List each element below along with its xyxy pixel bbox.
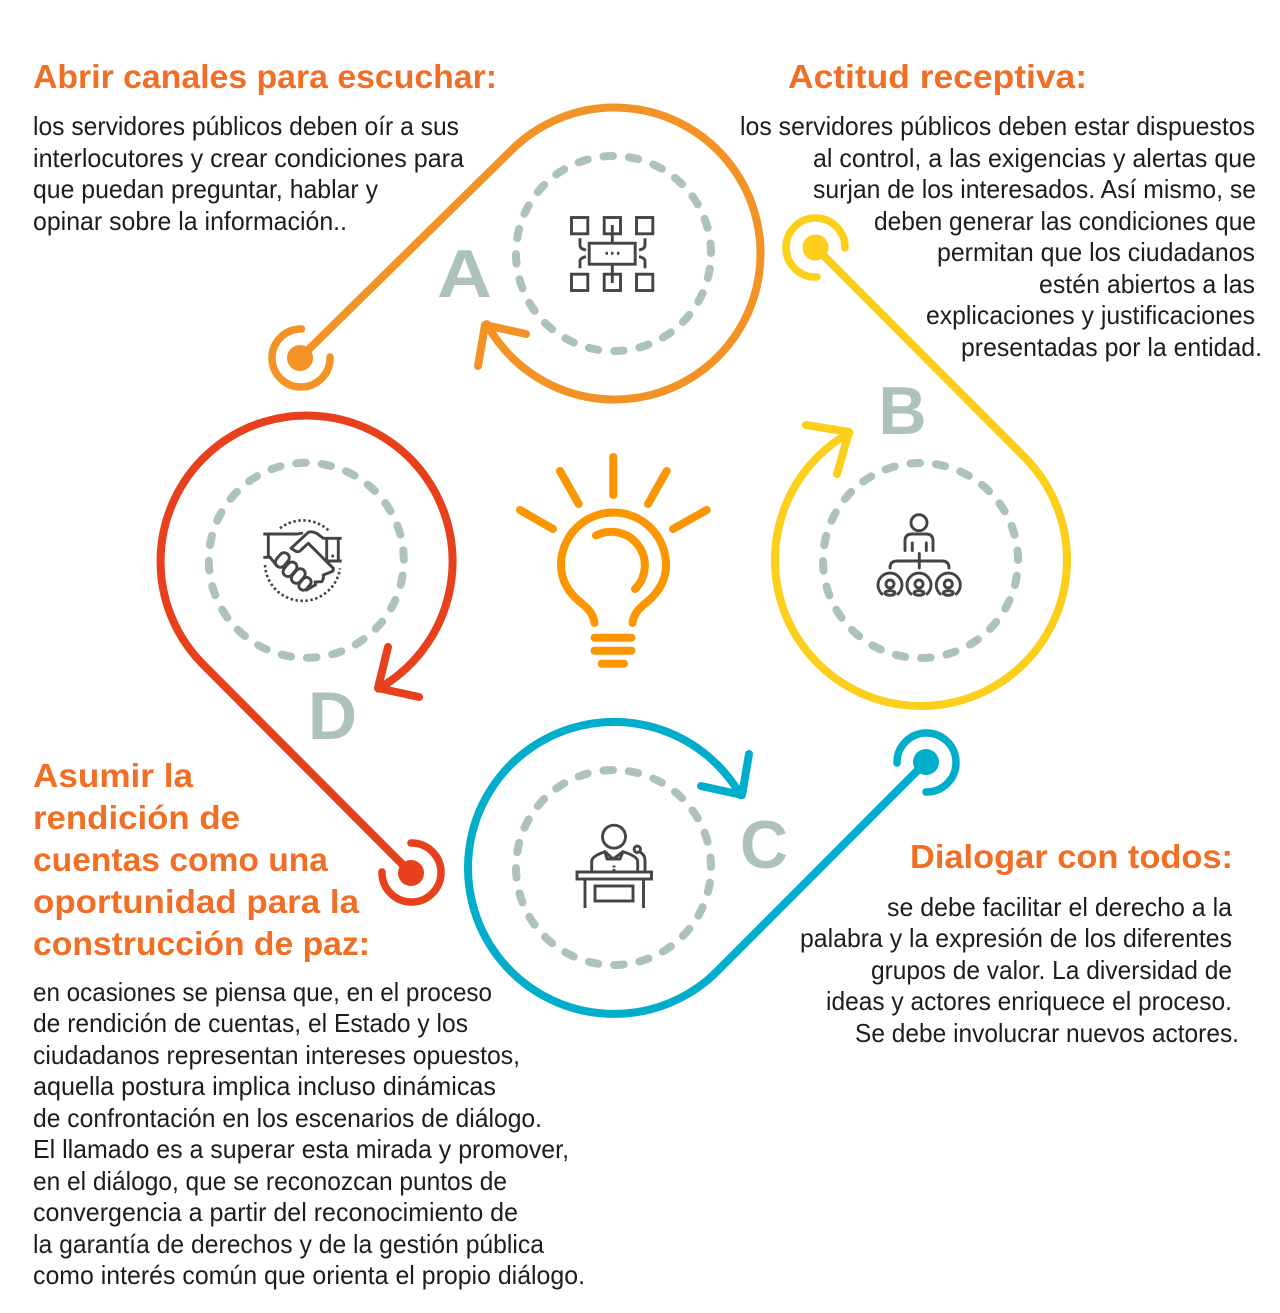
body C: ideas y actores enriquece el proceso. — [826, 986, 1232, 1016]
heading C: Dialogar con todos: — [910, 838, 1233, 875]
dashed circle D — [209, 463, 404, 658]
body B: explicaciones y justificaciones — [926, 300, 1255, 330]
icon: speaker at podium — [577, 825, 652, 908]
body B: permitan que los ciudadanos — [937, 237, 1255, 267]
body C — [800, 892, 1239, 1048]
body B: presentadas por la entidad. — [961, 332, 1262, 362]
body D: de confrontación en los escenarios de diálogo. — [33, 1103, 542, 1133]
text block: Dialogar con todos — [800, 838, 1239, 1048]
icon: central light bulb — [520, 457, 707, 664]
panel: C loop diagram — [468, 722, 956, 1014]
heading D: cuentas como una — [33, 841, 329, 878]
panel: B loop diagram — [775, 218, 1067, 706]
panel: D loop diagram — [161, 415, 453, 902]
dashed circle B — [823, 463, 1018, 658]
body D: ciudadanos representan intereses opuestos, — [33, 1040, 520, 1070]
letter D: D — [308, 678, 357, 754]
icon: handshake — [263, 520, 342, 601]
heading D: oportunidad para la — [33, 883, 360, 920]
body D: en ocasiones se piensa que, en el proceso — [33, 977, 492, 1007]
body B — [740, 111, 1262, 362]
body D: El llamado es a superar esta mirada y promover, — [33, 1134, 569, 1164]
heading D — [33, 757, 370, 962]
icon: people hierarchy — [878, 515, 960, 595]
body B: estén abiertos a las — [1039, 269, 1255, 299]
body B: deben generar las condiciones que — [874, 206, 1256, 236]
cyan loop with arrow — [468, 722, 956, 1014]
yellow loop with arrow — [775, 218, 1067, 706]
body A: los servidores públicos deben oír a sus — [33, 111, 459, 141]
body D: como interés común que orienta el propio diálogo. — [33, 1260, 585, 1290]
body D — [33, 977, 585, 1290]
body D: la garantía de derechos y de la gestión pública — [33, 1229, 545, 1259]
panel: A loop diagram — [272, 108, 761, 400]
body A: opinar sobre la información.. — [33, 206, 347, 236]
body D: de rendición de cuentas, el Estado y los — [33, 1008, 468, 1038]
body B: al control, a las exigencias y alertas que — [813, 143, 1256, 173]
text block: Actitud receptiva — [740, 58, 1262, 362]
text block: Asumir la rendición de cuentas — [33, 757, 585, 1290]
body C: se debe facilitar el derecho a la — [887, 892, 1233, 922]
icon: network of squares — [572, 218, 653, 290]
body C: grupos de valor. La diversidad de — [871, 955, 1232, 985]
heading D: rendición de — [33, 799, 240, 836]
body C: Se debe involucrar nuevos actores. — [855, 1018, 1239, 1048]
heading D: Asumir la — [33, 757, 194, 794]
body A: interlocutores y crear condiciones para — [33, 143, 465, 173]
body A: que puedan preguntar, hablar y — [33, 174, 378, 204]
letter B: B — [878, 373, 926, 449]
dashed circle C — [516, 770, 711, 965]
body C: palabra y la expresión de los diferentes — [800, 923, 1232, 953]
body D: aquella postura implica incluso dinámicas — [33, 1071, 496, 1101]
body D: convergencia a partir del reconocimiento de — [33, 1197, 518, 1227]
body D: en el diálogo, que se reconozcan puntos de — [33, 1166, 507, 1196]
text block: Abrir canales para escuchar — [33, 58, 497, 236]
letter A: A — [437, 236, 492, 312]
red loop with arrow — [161, 415, 453, 902]
heading A: Abrir canales para escuchar: — [33, 58, 497, 95]
body A — [33, 111, 465, 236]
heading B: Actitud receptiva: — [788, 58, 1087, 95]
dashed circle A — [516, 156, 711, 351]
body B: los servidores públicos deben estar dispuestos — [740, 111, 1255, 141]
heading D: construcción de paz: — [33, 925, 370, 962]
letter C: C — [740, 807, 788, 883]
orange loop with arrow — [272, 108, 761, 400]
body B: surjan de los interesados. Así mismo, se — [813, 174, 1256, 204]
